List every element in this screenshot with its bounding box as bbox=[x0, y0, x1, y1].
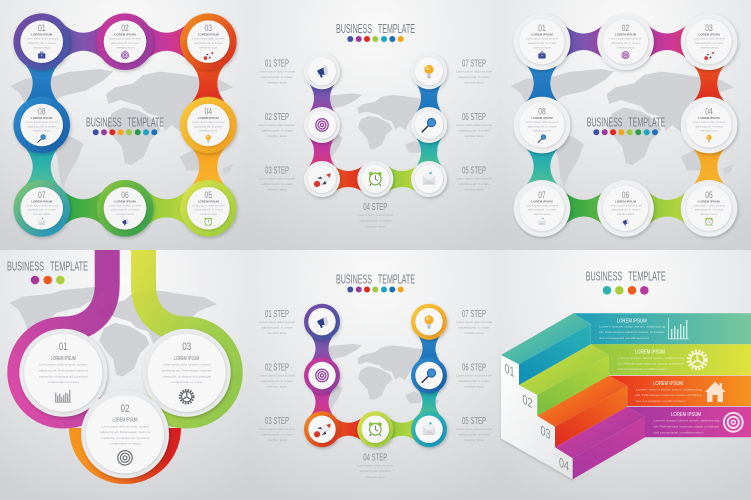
step 03: Lorem ipsum dolor sit amet bbox=[693, 37, 725, 41]
step ring 03 bbox=[304, 411, 340, 447]
title: BUSINESS TEMPLATE bbox=[336, 22, 415, 36]
color dots bbox=[347, 36, 404, 42]
label 05 step: interdum lacus bbox=[464, 188, 484, 192]
step 1 bbox=[501, 313, 591, 385]
step 02 bbox=[597, 13, 654, 70]
step numbers: 03 bbox=[540, 422, 551, 442]
disc 03: LOREM IPSUM bbox=[174, 356, 199, 362]
step 01: adipiscing elit. In ornare bbox=[528, 41, 557, 45]
disc 02: Lorem ipsum dolor sit amet, consect bbox=[101, 424, 149, 428]
label 06 step: Lorem ipsum dolor sit amet bbox=[456, 374, 492, 378]
label 07 step bbox=[456, 58, 492, 84]
step 01: interdum lacus bbox=[33, 45, 51, 49]
step 07: adipiscing elit. In ornare bbox=[28, 208, 56, 212]
label 02 step: adipiscing elit. In ornare bbox=[261, 379, 293, 383]
step 07: LOREM IPSUM bbox=[531, 199, 553, 203]
step 08: interdum lacus bbox=[533, 129, 551, 133]
icon: house bbox=[705, 382, 726, 402]
disc 02: adipiscing elit. Pellentesque maximus bbox=[100, 430, 150, 434]
band 3: LOREM IPSUM bbox=[653, 381, 683, 387]
label 01 step: Lorem ipsum dolor sit amet bbox=[259, 320, 295, 324]
step 01: LOREM IPSUM bbox=[531, 33, 553, 37]
step 07: interdum lacus bbox=[33, 212, 51, 216]
band 3: dui consequat condimentum bbox=[636, 399, 686, 403]
connectors bbox=[306, 79, 445, 195]
step 07: 07 bbox=[38, 190, 45, 201]
step 04: Lorem ipsum dolor sit amet bbox=[693, 120, 725, 124]
step 08: Lorem ipsum dolor sit amet bbox=[526, 120, 558, 124]
label 05 step: 05 STEP bbox=[462, 166, 486, 176]
step 04 bbox=[180, 97, 237, 153]
label 01 step: adipiscing elit. In ornare bbox=[261, 75, 293, 79]
white side of stairs bbox=[501, 355, 573, 479]
step 03: interdum lacus bbox=[200, 45, 218, 49]
title: BUSINESS TEMPLATE bbox=[587, 115, 665, 129]
label 06 step: 06 STEP bbox=[462, 112, 486, 123]
label 01 step: Lorem ipsum dolor sit amet bbox=[259, 70, 295, 74]
step 06: 06 bbox=[121, 190, 129, 201]
step 03: 03 bbox=[705, 23, 713, 34]
world map bbox=[511, 69, 734, 188]
band 2: LOREM IPSUM bbox=[635, 350, 665, 356]
panel: seven steps with white discs bbox=[259, 22, 492, 228]
step 05: 05 bbox=[205, 190, 212, 201]
color dots bbox=[347, 286, 404, 292]
step 02: 02 bbox=[622, 23, 629, 34]
disc 01: adipiscing elit. Pellentesque maximus bbox=[38, 369, 89, 373]
step 06: interdum lacus bbox=[617, 212, 635, 216]
step 06: Lorem ipsum dolor sit amet bbox=[109, 203, 141, 207]
step disc 06 bbox=[411, 107, 447, 143]
step 03: adipiscing elit. In ornare bbox=[194, 41, 223, 45]
band 4: LOREM IPSUM bbox=[671, 412, 701, 418]
step ring 05 bbox=[411, 411, 447, 447]
band 4: elit. Pellentesque maximus massa, ut tristique bbox=[654, 424, 720, 428]
step 04: LOREM IPSUM bbox=[198, 116, 219, 120]
step 04: 04 bbox=[705, 106, 713, 118]
step 07: adipiscing elit. In ornare bbox=[528, 208, 557, 212]
orange ring 02 bbox=[82, 428, 168, 472]
title: BUSINESS TEMPLATE bbox=[7, 260, 88, 274]
step 04: interdum lacus bbox=[700, 129, 718, 133]
label 06 step: 06 STEP bbox=[462, 362, 486, 374]
connectors bbox=[518, 18, 733, 232]
band 3: elit. Pellentesque maximus massa, ut tristique bbox=[636, 393, 702, 397]
step 02: LOREM IPSUM bbox=[615, 33, 637, 37]
label 02 step bbox=[259, 112, 295, 138]
label 04 step: adipiscing elit. In ornare bbox=[359, 218, 391, 222]
label 03 step bbox=[259, 166, 295, 192]
step 05: LOREM IPSUM bbox=[698, 199, 720, 203]
step 01: interdum lacus bbox=[533, 45, 551, 49]
label 02 step: interdum lacus bbox=[267, 134, 287, 138]
step 01 bbox=[514, 13, 570, 70]
step numbers: 02 bbox=[522, 391, 533, 411]
step 04 bbox=[681, 97, 737, 153]
step 03: 03 bbox=[205, 23, 212, 34]
step 02: adipiscing elit. In ornare bbox=[111, 41, 140, 45]
panel: 3D staircase bbox=[501, 270, 751, 479]
disc 02: condimentum ex neque bbox=[109, 442, 141, 446]
step 4 bbox=[555, 407, 645, 479]
band 1 bbox=[573, 313, 751, 344]
step 02: adipiscing elit. In ornare bbox=[611, 41, 640, 45]
step 04: 04 bbox=[205, 106, 212, 118]
label 05 step: Lorem ipsum dolor sit amet bbox=[456, 427, 492, 431]
label 04 step: 04 STEP bbox=[363, 202, 387, 213]
label 07 step: 07 STEP bbox=[462, 309, 486, 320]
label 01 step: 01 STEP bbox=[265, 58, 289, 70]
label 01 step: interdum lacus bbox=[267, 331, 287, 335]
label 01 step: 01 STEP bbox=[265, 309, 289, 320]
step 05: adipiscing elit. In ornare bbox=[695, 208, 724, 212]
step 08: Lorem ipsum dolor sit amet bbox=[25, 120, 58, 124]
step 02: Lorem ipsum dolor sit amet bbox=[109, 37, 141, 41]
icon: gear bbox=[180, 390, 194, 404]
disc 01: LOREM IPSUM bbox=[51, 356, 76, 362]
band 2: Lorem ipsum dolor amet, adipiscing bbox=[618, 356, 684, 360]
label 06 step: adipiscing elit. In ornare bbox=[458, 128, 490, 132]
step 04: adipiscing elit. In ornare bbox=[194, 124, 223, 128]
step 06: Lorem ipsum dolor sit amet bbox=[609, 203, 642, 207]
band 3: Lorem ipsum dolor amet, adipiscing bbox=[636, 388, 702, 392]
step 06: 06 bbox=[622, 190, 629, 201]
step disc 05 bbox=[411, 161, 447, 197]
disc 01: 01 bbox=[59, 341, 68, 353]
label 07 step: Lorem ipsum dolor sit amet bbox=[456, 70, 492, 74]
lime ribbon 03 bbox=[144, 250, 230, 416]
step 05: Lorem ipsum dolor sit amet bbox=[693, 203, 725, 207]
step 3 bbox=[537, 376, 627, 447]
color dots bbox=[603, 286, 649, 295]
panel: colored eight-step ring bbox=[10, 13, 237, 237]
band 4: dui consequat condimentum bbox=[654, 430, 704, 434]
step 02: 02 bbox=[121, 23, 129, 34]
world map bbox=[9, 287, 217, 398]
step 05: adipiscing elit. In ornare bbox=[194, 208, 223, 212]
title: BUSINESS TEMPLATE bbox=[586, 270, 666, 284]
disc 01: Lorem ipsum dolor sit amet, consect bbox=[39, 363, 88, 367]
disc 02: LOREM IPSUM bbox=[112, 417, 138, 423]
step ring 06 bbox=[411, 358, 447, 394]
step disc 04 bbox=[357, 161, 393, 197]
color dots bbox=[593, 129, 658, 135]
world map bbox=[10, 69, 233, 188]
icon: bar chart bbox=[55, 390, 71, 402]
label 03 step: 03 STEP bbox=[265, 416, 289, 427]
label 07 step: Lorem ipsum dolor sit amet bbox=[456, 320, 492, 324]
step 01: Lorem ipsum dolor sit amet bbox=[526, 37, 558, 41]
label 07 step: adipiscing elit. In ornare bbox=[458, 75, 490, 79]
icon: gear bbox=[688, 351, 706, 369]
label 04 step bbox=[357, 452, 394, 479]
label 04 step: Lorem ipsum dolor sit amet bbox=[357, 213, 394, 217]
band 1: elit. Pellentesque maximus massa, ut tristique bbox=[599, 330, 665, 334]
title: BUSINESS TEMPLATE bbox=[86, 115, 164, 129]
label 02 step: adipiscing elit. In ornare bbox=[261, 128, 293, 132]
step 06: adipiscing elit. In ornare bbox=[611, 208, 640, 212]
step 2 bbox=[519, 344, 609, 416]
step 02: interdum lacus bbox=[617, 45, 635, 49]
disc 03: condimentum ex neque bbox=[171, 380, 203, 384]
label 07 step: interdum lacus bbox=[464, 331, 484, 335]
icon: bars bbox=[668, 318, 689, 339]
step 06: adipiscing elit. In ornare bbox=[111, 208, 140, 212]
step 06: interdum lacus bbox=[116, 212, 134, 216]
step 05: Lorem ipsum dolor sit amet bbox=[192, 203, 225, 207]
step 03: Lorem ipsum dolor sit amet bbox=[192, 37, 225, 41]
label 04 step: 04 STEP bbox=[363, 452, 387, 464]
disc 01: condimentum ex neque bbox=[48, 380, 79, 384]
label 07 step: 07 STEP bbox=[462, 58, 486, 70]
step 07: interdum lacus bbox=[533, 212, 551, 216]
step numbers: 01 bbox=[504, 360, 515, 380]
step 06 bbox=[597, 180, 654, 237]
step 03: LOREM IPSUM bbox=[698, 33, 720, 37]
step 07 bbox=[13, 180, 70, 237]
step disc 03 bbox=[304, 161, 340, 197]
step 01: 01 bbox=[38, 23, 45, 34]
step numbers: 04 bbox=[559, 454, 569, 474]
label 04 step: adipiscing elit. In ornare bbox=[359, 469, 391, 473]
label 06 step bbox=[456, 112, 492, 138]
label 02 step: interdum lacus bbox=[267, 384, 287, 388]
label 01 step: adipiscing elit. In ornare bbox=[261, 326, 293, 330]
label 02 step: Lorem ipsum dolor sit amet bbox=[259, 123, 295, 127]
label 06 step: interdum lacus bbox=[464, 384, 484, 388]
label 07 step: interdum lacus bbox=[464, 80, 484, 84]
label 04 step: interdum lacus bbox=[366, 224, 386, 228]
label 05 step: 05 STEP bbox=[462, 416, 486, 427]
label 02 step: 02 STEP bbox=[265, 112, 289, 123]
label 02 step: 02 STEP bbox=[265, 362, 289, 374]
step 04: Lorem ipsum dolor sit amet bbox=[192, 120, 225, 124]
label 02 step: Lorem ipsum dolor sit amet bbox=[259, 374, 295, 378]
step ring 07 bbox=[411, 304, 447, 340]
step 08 bbox=[514, 97, 570, 153]
step 08: adipiscing elit. In ornare bbox=[28, 124, 56, 128]
disc 01 bbox=[19, 329, 107, 417]
step 08: 08 bbox=[538, 106, 546, 118]
band 2: elit. Pellentesque maximus massa, ut tristique bbox=[618, 362, 684, 366]
step 01: LOREM IPSUM bbox=[31, 33, 53, 37]
disc 03: 03 bbox=[182, 341, 191, 353]
step 01 bbox=[13, 13, 70, 70]
label 06 step bbox=[456, 362, 492, 388]
step 03: adipiscing elit. In ornare bbox=[695, 41, 724, 45]
step disc 07 bbox=[411, 53, 447, 89]
color dots bbox=[93, 129, 157, 135]
band 1: Lorem ipsum dolor amet, adipiscing bbox=[599, 324, 665, 328]
world map bbox=[330, 94, 440, 159]
panel: seven colored steps bbox=[259, 272, 492, 479]
step 08 bbox=[13, 97, 70, 153]
label 05 step bbox=[456, 416, 492, 442]
step 01: 01 bbox=[538, 23, 546, 34]
label 03 step: Lorem ipsum dolor sit amet bbox=[259, 176, 295, 180]
label 05 step bbox=[456, 166, 492, 192]
band 2: dui consequat condimentum bbox=[618, 367, 668, 371]
step 08: interdum lacus bbox=[33, 129, 51, 133]
step disc 01 bbox=[304, 53, 340, 89]
panel: white eight-step ring bbox=[511, 13, 737, 237]
step 02 bbox=[97, 13, 153, 70]
connectors bbox=[306, 330, 445, 446]
step 05: interdum lacus bbox=[200, 212, 218, 216]
label 01 step: interdum lacus bbox=[267, 80, 287, 84]
step 05 bbox=[180, 180, 237, 237]
step 01: Lorem ipsum dolor sit amet bbox=[25, 37, 58, 41]
label 07 step bbox=[456, 309, 492, 335]
label 07 step: adipiscing elit. In ornare bbox=[458, 326, 490, 330]
step 02: LOREM IPSUM bbox=[114, 33, 136, 37]
step 07: Lorem ipsum dolor sit amet bbox=[25, 203, 58, 207]
step ring 04 bbox=[357, 411, 393, 447]
icon: target bbox=[724, 413, 743, 432]
step numbers bbox=[504, 360, 569, 474]
step 04: adipiscing elit. In ornare bbox=[695, 124, 724, 128]
label 06 step: interdum lacus bbox=[464, 134, 484, 138]
label 06 step: Lorem ipsum dolor sit amet bbox=[456, 123, 492, 127]
step 03: interdum lacus bbox=[700, 45, 718, 49]
step 02: interdum lacus bbox=[116, 45, 134, 49]
step 05 bbox=[681, 180, 737, 237]
step 03: LOREM IPSUM bbox=[198, 33, 219, 37]
disc 02: 02 bbox=[120, 403, 130, 415]
disc 03: massa dui, ut tristique dui consequat bbox=[162, 374, 211, 378]
step ring 02 bbox=[304, 358, 340, 394]
world map bbox=[328, 344, 440, 412]
label 03 step: interdum lacus bbox=[267, 438, 287, 442]
label 05 step: Lorem ipsum dolor sit amet bbox=[456, 176, 492, 180]
color dots bbox=[31, 276, 65, 284]
disc 02 bbox=[81, 390, 169, 478]
purple ribbon 01 bbox=[20, 250, 107, 416]
title: BUSINESS TEMPLATE bbox=[336, 272, 415, 286]
band 1: dui consequat condimentum bbox=[599, 336, 650, 340]
step 06 bbox=[97, 180, 153, 237]
step 05: 05 bbox=[705, 190, 713, 201]
label 03 step: interdum lacus bbox=[267, 188, 287, 192]
step 08: LOREM IPSUM bbox=[31, 116, 53, 120]
step 07: LOREM IPSUM bbox=[31, 199, 53, 203]
step 08: LOREM IPSUM bbox=[531, 116, 553, 120]
step 07: Lorem ipsum dolor sit amet bbox=[526, 203, 558, 207]
step 07 bbox=[514, 180, 570, 237]
panel: three overlapping rings bbox=[7, 250, 231, 478]
step ring 01 bbox=[304, 304, 340, 340]
step disc 02 bbox=[304, 107, 340, 143]
step 04: LOREM IPSUM bbox=[698, 116, 720, 120]
label 05 step: adipiscing elit. In ornare bbox=[458, 432, 490, 436]
label 03 step: adipiscing elit. In ornare bbox=[261, 432, 293, 436]
label 04 step: interdum lacus bbox=[366, 475, 386, 479]
band 4: Lorem ipsum dolor amet, adipiscing bbox=[654, 418, 720, 422]
label 01 step bbox=[259, 309, 295, 335]
label 05 step: adipiscing elit. In ornare bbox=[458, 182, 490, 186]
label 03 step: Lorem ipsum dolor sit amet bbox=[259, 427, 295, 431]
band 1: LOREM IPSUM bbox=[617, 319, 647, 325]
label 04 step bbox=[357, 202, 394, 228]
label 03 step: adipiscing elit. In ornare bbox=[261, 182, 293, 186]
step 05: interdum lacus bbox=[700, 212, 718, 216]
step 08: 08 bbox=[38, 106, 45, 118]
step 08: adipiscing elit. In ornare bbox=[528, 124, 557, 128]
disc 02: massa dui, ut tristique dui consequat bbox=[101, 436, 150, 440]
step 02: Lorem ipsum dolor sit amet bbox=[609, 37, 642, 41]
band 4 bbox=[627, 407, 751, 437]
label 02 step bbox=[259, 362, 295, 388]
band 2 bbox=[591, 344, 751, 375]
connectors bbox=[18, 18, 232, 232]
disc 03 bbox=[143, 329, 231, 417]
label 03 step: 03 STEP bbox=[265, 166, 289, 176]
label 03 step bbox=[259, 416, 295, 442]
step 06: LOREM IPSUM bbox=[114, 199, 136, 203]
step 03 bbox=[180, 13, 237, 70]
step 01: adipiscing elit. In ornare bbox=[28, 41, 56, 45]
band 3 bbox=[609, 376, 751, 406]
step 03 bbox=[681, 13, 737, 70]
disc 03: Lorem ipsum dolor sit amet, consect bbox=[163, 363, 211, 367]
disc 01: massa dui, ut tristique dui consequat bbox=[39, 374, 88, 378]
label 06 step: adipiscing elit. In ornare bbox=[458, 379, 490, 383]
label 01 step bbox=[259, 58, 295, 84]
disc 03: adipiscing elit. Pellentesque maximus bbox=[162, 369, 212, 373]
step 07: 07 bbox=[538, 190, 546, 201]
step 04: interdum lacus bbox=[200, 129, 218, 133]
label 05 step: interdum lacus bbox=[464, 438, 484, 442]
step 05: LOREM IPSUM bbox=[198, 199, 219, 203]
icon: target bbox=[118, 451, 132, 465]
label 04 step: Lorem ipsum dolor sit amet bbox=[357, 464, 394, 468]
step 06: LOREM IPSUM bbox=[615, 199, 637, 203]
